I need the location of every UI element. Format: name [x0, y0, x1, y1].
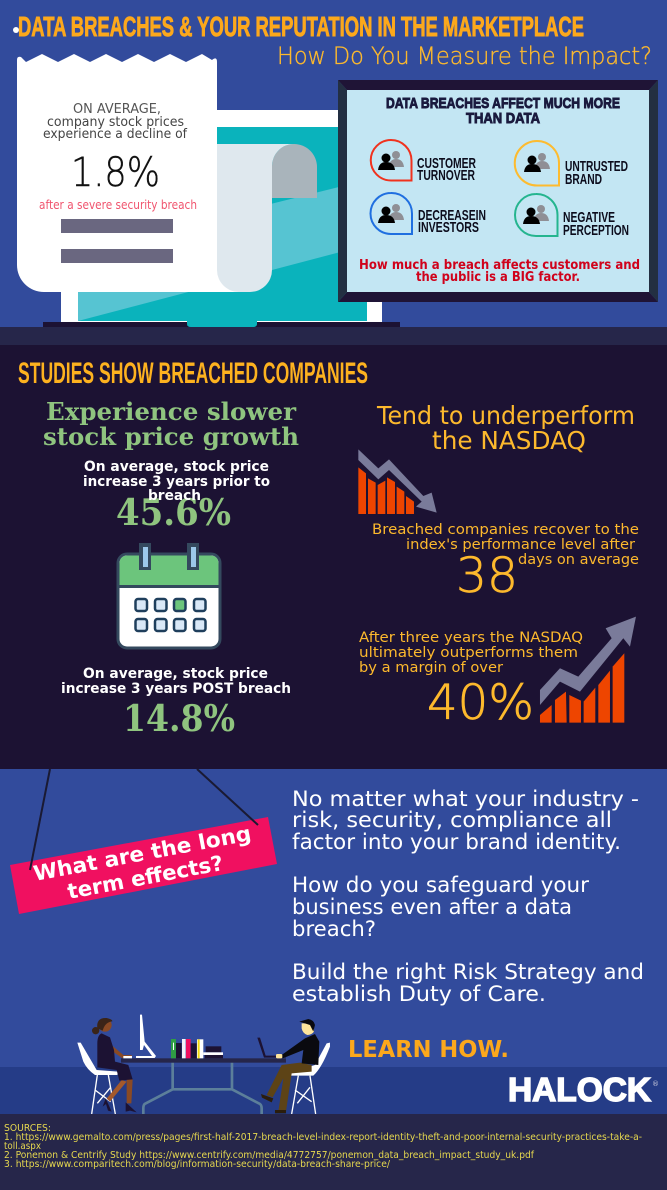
panel heading: THAN DATA — [466, 110, 540, 127]
text block: safeguard: business even after a data — [292, 895, 572, 919]
text: NASDAQ outperforms — [359, 630, 583, 676]
panel: studies background — [0, 345, 667, 769]
divider band — [0, 327, 667, 345]
text block: industry: No matter what your industry - — [292, 787, 639, 811]
label: negative perception — [563, 209, 629, 239]
panel heading: DATA BREACHES AFFECT MUCH MORE — [386, 95, 620, 112]
text: post breach: On average, stock price — [83, 666, 268, 682]
icon: calendar — [118, 543, 220, 648]
text block: industry — [292, 787, 639, 854]
label: untrusted brand — [565, 158, 628, 188]
label: customer turnover: CUSTOMER — [417, 155, 476, 172]
receipt text: company stock prices — [47, 115, 184, 130]
table — [121, 1058, 286, 1114]
label: negative perception: PERCEPTION — [563, 222, 629, 239]
stat: 1.8%: 1.8% — [71, 150, 160, 196]
sources: 2. Ponemon & Centrify Study https://www.centrify.com/media/4772757/ponemon_data_breach_impact_study_uk.pdf — [4, 1150, 535, 1161]
logo: HALOCK: HALOCK — [508, 1071, 651, 1108]
text: post breach: increase 3 years POST breach — [61, 681, 291, 697]
receipt bars — [61, 219, 173, 263]
books — [171, 1039, 223, 1058]
icon: customer turnover — [371, 140, 412, 180]
receipt — [17, 54, 217, 292]
panel heading — [386, 95, 620, 127]
text block: safeguard — [292, 873, 589, 941]
panel note: the public is a BIG factor. — [416, 270, 580, 285]
text block: safeguard: How do you safeguard your — [292, 873, 589, 897]
stat: 14.8%: 14.8% — [123, 698, 235, 740]
woman — [92, 1018, 137, 1112]
footer background — [0, 1114, 667, 1190]
text block: risk strategy: establish Duty of Care. — [292, 982, 546, 1006]
heading: underperform the NASDAQ: the NASDAQ — [432, 426, 586, 455]
illustration: two people at a table — [77, 1015, 330, 1114]
panel: long term effects background — [0, 769, 667, 1067]
call to action: LEARN HOW. — [348, 1037, 509, 1063]
icon: negative perception — [515, 194, 558, 236]
panel: data breaches affect more than data — [338, 80, 658, 302]
label: customer turnover: TURNOVER — [417, 167, 475, 184]
text: prior to breach: breach — [148, 488, 201, 504]
label: customer turnover — [417, 155, 476, 184]
panel note — [359, 258, 640, 285]
heading: slower stock price growth: stock price growth — [43, 422, 299, 451]
text: prior to breach: On average, stock price — [84, 459, 269, 475]
stat: 38: 38 — [456, 548, 518, 604]
floor band — [0, 1067, 667, 1114]
hanging sign: term effects? — [65, 851, 225, 904]
sources — [4, 1123, 642, 1170]
receipt text: ON AVERAGE, — [73, 102, 161, 117]
chart icon: rising bars and arrow — [540, 617, 636, 723]
illustration: monitor with receipt — [17, 54, 400, 328]
text: prior to breach — [83, 459, 270, 504]
label: negative perception: NEGATIVE — [563, 209, 615, 226]
paper curl — [200, 144, 317, 292]
logo: HALOCK: ® — [652, 1080, 659, 1088]
stat: 40%: 40% — [427, 675, 534, 731]
label: decrease in investors — [418, 207, 486, 236]
hanging sign — [10, 769, 277, 914]
heading: slower stock price growth: Experience slower — [46, 397, 296, 426]
monitor base — [43, 321, 400, 328]
text: NASDAQ outperforms: After three years the NASDAQ — [359, 630, 583, 646]
stat: 45.6%: 45.6% — [116, 492, 231, 534]
text block: safeguard: breach? — [292, 917, 376, 941]
computer monitor — [123, 1015, 156, 1058]
hanging sign: What are the long — [31, 821, 253, 886]
label: decrease in investors: INVESTORS — [418, 219, 479, 236]
text: NASDAQ outperforms: by a margin of over — [359, 660, 503, 676]
monitor screen — [61, 110, 382, 322]
text: NASDAQ outperforms: ultimately outperforms them — [359, 645, 578, 661]
text: post breach — [61, 666, 291, 697]
top section background — [0, 0, 667, 327]
woman's chair — [77, 1043, 118, 1114]
text block: risk strategy: Build the right Risk Strategy and — [292, 960, 644, 984]
sources: 3. https://www.comparitech.com/blog/information-security/data-breach-share-price/ — [4, 1159, 391, 1170]
label: untrusted brand: BRAND — [565, 171, 602, 188]
sources: SOURCES: — [4, 1123, 51, 1134]
panel note: How much a breach affects customers and — [359, 258, 640, 273]
chart icon: falling bars and arrow — [358, 449, 437, 514]
heading: slower stock price growth — [43, 397, 299, 451]
text: recover to index: days on average — [518, 552, 639, 568]
text block: industry: factor into your brand identity. — [292, 830, 621, 854]
text: recover to index — [372, 522, 639, 568]
heading: underperform the NASDAQ — [376, 401, 635, 455]
text: recover to index: Breached companies recover to the — [372, 522, 639, 538]
caption: after a severe security breach — [39, 198, 197, 212]
man — [261, 1019, 319, 1113]
receipt text: experience a decline of — [43, 127, 187, 142]
section heading: STUDIES SHOW BREACHED COMPANIES — [18, 357, 368, 390]
man's chair — [288, 1043, 330, 1114]
icon: untrusted brand — [515, 141, 559, 186]
laptop — [257, 1038, 286, 1058]
text: prior to breach: increase 3 years prior to — [83, 474, 270, 490]
text: recover to index: index's performance level after — [406, 537, 635, 553]
receipt text — [43, 102, 187, 142]
label: decrease in investors: DECREASEIN — [418, 207, 486, 224]
icon: decrease in investors — [370, 193, 412, 234]
sources: toll.aspx — [4, 1141, 41, 1152]
text block: risk strategy — [292, 960, 644, 1006]
heading: underperform the NASDAQ: Tend to underperform — [376, 401, 635, 430]
sources: 1. https://www.gemalto.com/press/pages/first-half-2017-breach-level-index-report-identity-theft-and-poor-internal-security-practices-take-a- — [4, 1132, 642, 1143]
text block: industry: risk, security, compliance all — [292, 808, 612, 832]
label: untrusted brand: UNTRUSTED — [565, 158, 628, 175]
